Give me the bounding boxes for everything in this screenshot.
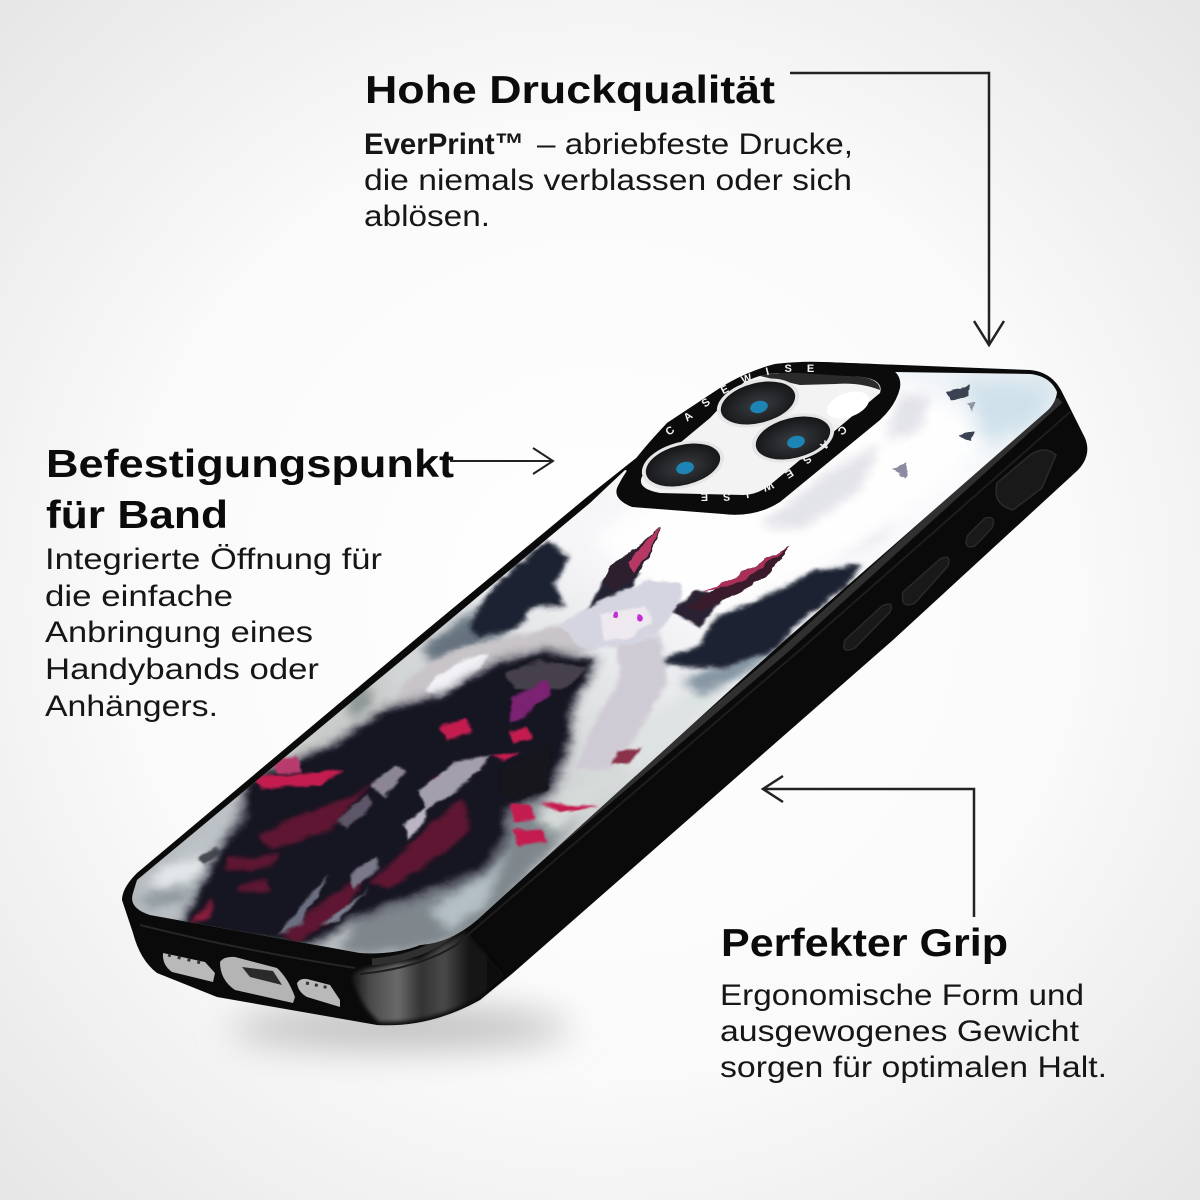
text block: strap attachment [45,543,382,723]
horn left [603,527,660,592]
dark hem [516,757,550,802]
text block: print quality: ablösen. [364,200,490,233]
text block: print quality: die niemals verblassen oder sich [364,164,852,197]
usb port [220,957,295,1003]
hair head [557,580,682,650]
camera window [641,373,881,495]
hair flow right [575,635,668,770]
text block: print quality: – abriebfeste Drucke, [537,128,853,161]
heading: strap attachment: für Band [46,494,228,537]
lower left mist [137,670,390,925]
face [600,605,652,640]
heading: strap attachment: Befestigungspunkt [46,443,454,486]
pale lilac clouds [760,395,930,565]
right wing [652,565,862,668]
left wing [468,540,570,638]
callout: print quality [364,69,1004,345]
camera ring [616,362,900,515]
lens left [637,433,729,497]
dress [187,655,593,942]
callout: grip [720,776,1107,1084]
lens top [712,371,804,435]
text block: grip [720,979,1107,1084]
art print [132,372,1057,954]
rose and crimson accents [250,718,642,846]
eyes [612,612,643,621]
heading: print quality: Hohe Druckqualität [365,69,775,112]
window glare [823,386,873,424]
hair highlight [425,655,490,700]
maroon drapes [190,770,472,942]
lower right mist [337,680,741,954]
side buttons [844,450,1056,650]
wing fade [416,604,510,664]
glossy corner [352,932,505,1022]
bottom rim line [140,925,355,968]
text block: print quality: EverPrint™ [364,128,524,161]
ring lettering bottom: CASEWISE [701,426,846,501]
text block: strap attachment: Handybands oder [45,653,319,686]
arrow: to case top [790,73,1004,345]
text block: print quality [364,128,853,233]
side band groove [360,412,1070,974]
pale blue swirl [960,378,1055,445]
case body [122,362,1087,1025]
horn base left [586,572,642,610]
text block: grip: sorgen für optimalen Halt. [720,1051,1107,1084]
text block: strap attachment: die einfache [45,580,233,613]
heading: strap attachment [46,443,454,537]
pale legs [278,755,490,935]
lens right [747,406,839,470]
camera island [616,362,900,515]
text block: strap attachment: Integrierte Öffnung für [45,543,382,576]
speaker left [163,953,215,982]
arrow: to case side [763,776,974,917]
callout: strap attachment [45,443,553,723]
text block: strap attachment: Anbringung eines [45,616,313,649]
phone drop shadow [230,1006,570,1050]
horn base right [670,590,722,628]
hair swirl left [397,624,588,704]
text block: grip: Ergonomische Form und [720,979,1084,1012]
speaker right [297,979,340,1007]
heading: grip: Perfekter Grip [721,922,1008,965]
arrow: to strap point [450,448,553,474]
ring lettering top: CASEWISE [666,364,814,434]
charging ports [163,953,340,1007]
right wing fade [680,630,790,695]
bodice [505,660,590,690]
phone case [122,362,1088,1026]
text block: strap attachment: Anhängers. [45,690,218,723]
side band rim highlight [372,400,1060,962]
magenta sparkle [510,680,550,724]
rim shadow [760,373,880,390]
horn right [688,547,790,612]
white clouds [613,404,976,598]
text block: grip: ausgewogenes Gewicht [720,1015,1080,1048]
flecks top right [892,385,975,478]
small dark blot [198,847,222,866]
dress shadow [180,650,598,946]
